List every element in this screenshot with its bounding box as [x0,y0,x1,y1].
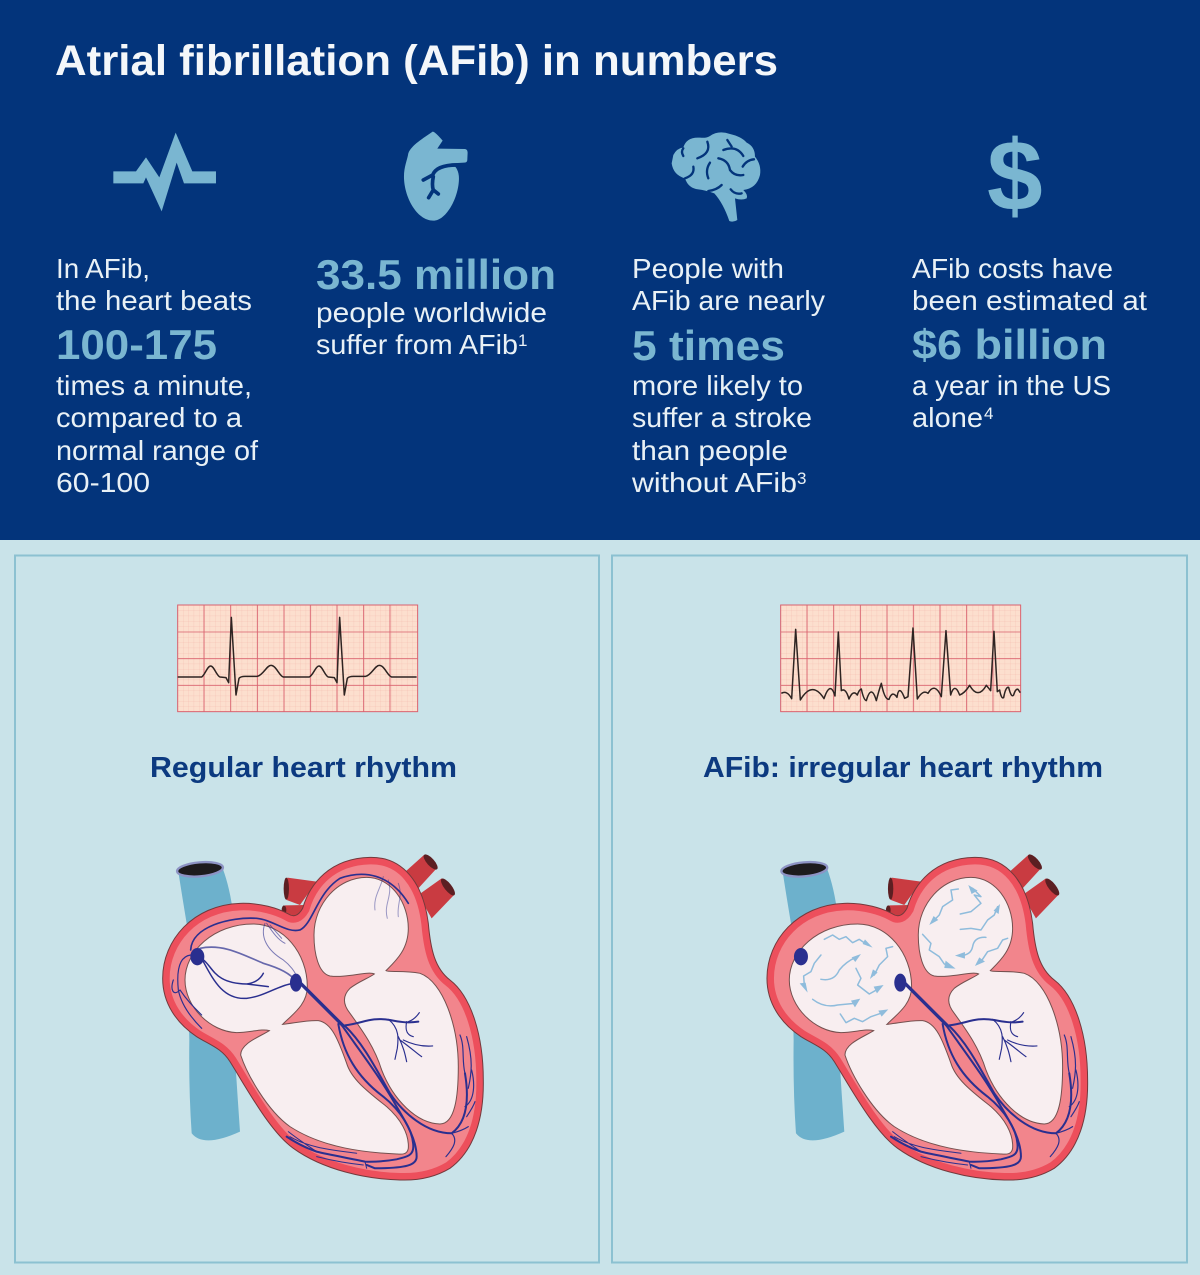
text block: stroke risk: AFib are nearly [632,285,825,316]
panel: numbers header [0,0,1200,540]
text block: people affected [316,251,556,360]
panel: regular heart rhythm [15,556,599,1262]
text block: costs: AFib costs have [912,253,1113,284]
text block: stroke risk [631,253,825,498]
text block: heart rate: compared to a [56,402,243,433]
icon: heart [404,132,468,221]
text block: people affected: suffer from AFib [316,329,518,360]
text block: stroke risk: People with [632,253,784,284]
icon: dollar sign: $ [987,120,1043,232]
text block: heart rate: In AFib, [56,253,150,284]
text block: heart rate: the heart beats [56,285,252,316]
text block: costs [912,253,1147,433]
text block: people affected: 1 [518,331,527,350]
text block: stroke risk: more likely to [632,370,803,401]
text block: stroke risk: 3 [797,469,806,488]
heading: AFib irregular heart rhythm: AFib: irregular heart rhythm [703,752,1103,784]
text block: heart rate: 60-100 [56,467,150,498]
text block: stroke risk: suffer a stroke [632,402,812,433]
panel: AFib irregular heart rhythm [612,556,1187,1262]
text block: people affected: 33.5 million [316,251,556,298]
text block: costs: $6 billion [912,321,1107,368]
icon: brain [672,132,760,222]
text block: stroke risk: 5 times [632,322,785,369]
text block: costs: 4 [984,404,993,423]
text block: heart rate: normal range of [56,435,258,466]
illustration: heart with regular conduction [163,852,483,1180]
text block: people affected: people worldwide [316,297,547,328]
icon: pulse line [113,133,216,211]
chart: regular ECG strip [178,605,418,712]
text block: stroke risk: without AFib [631,467,797,498]
heading: regular heart rhythm: Regular heart rhythm [150,752,457,784]
icon: chaotic electrical signal arrows [804,888,1008,1023]
text block: costs: a year in the US [912,370,1111,401]
chart: irregular ECG strip [781,605,1021,712]
text block: stroke risk: than people [632,435,788,466]
illustration: heart with chaotic atrial signals [767,852,1088,1180]
text block: heart rate [56,253,258,498]
text block: costs: been estimated at [912,285,1147,316]
text block: costs: alone [912,402,983,433]
text block: heart rate: times a minute, [56,370,252,401]
text block: heart rate: 100-175 [56,321,217,368]
title: Atrial fibrillation (AFib) in numbers [55,37,778,85]
